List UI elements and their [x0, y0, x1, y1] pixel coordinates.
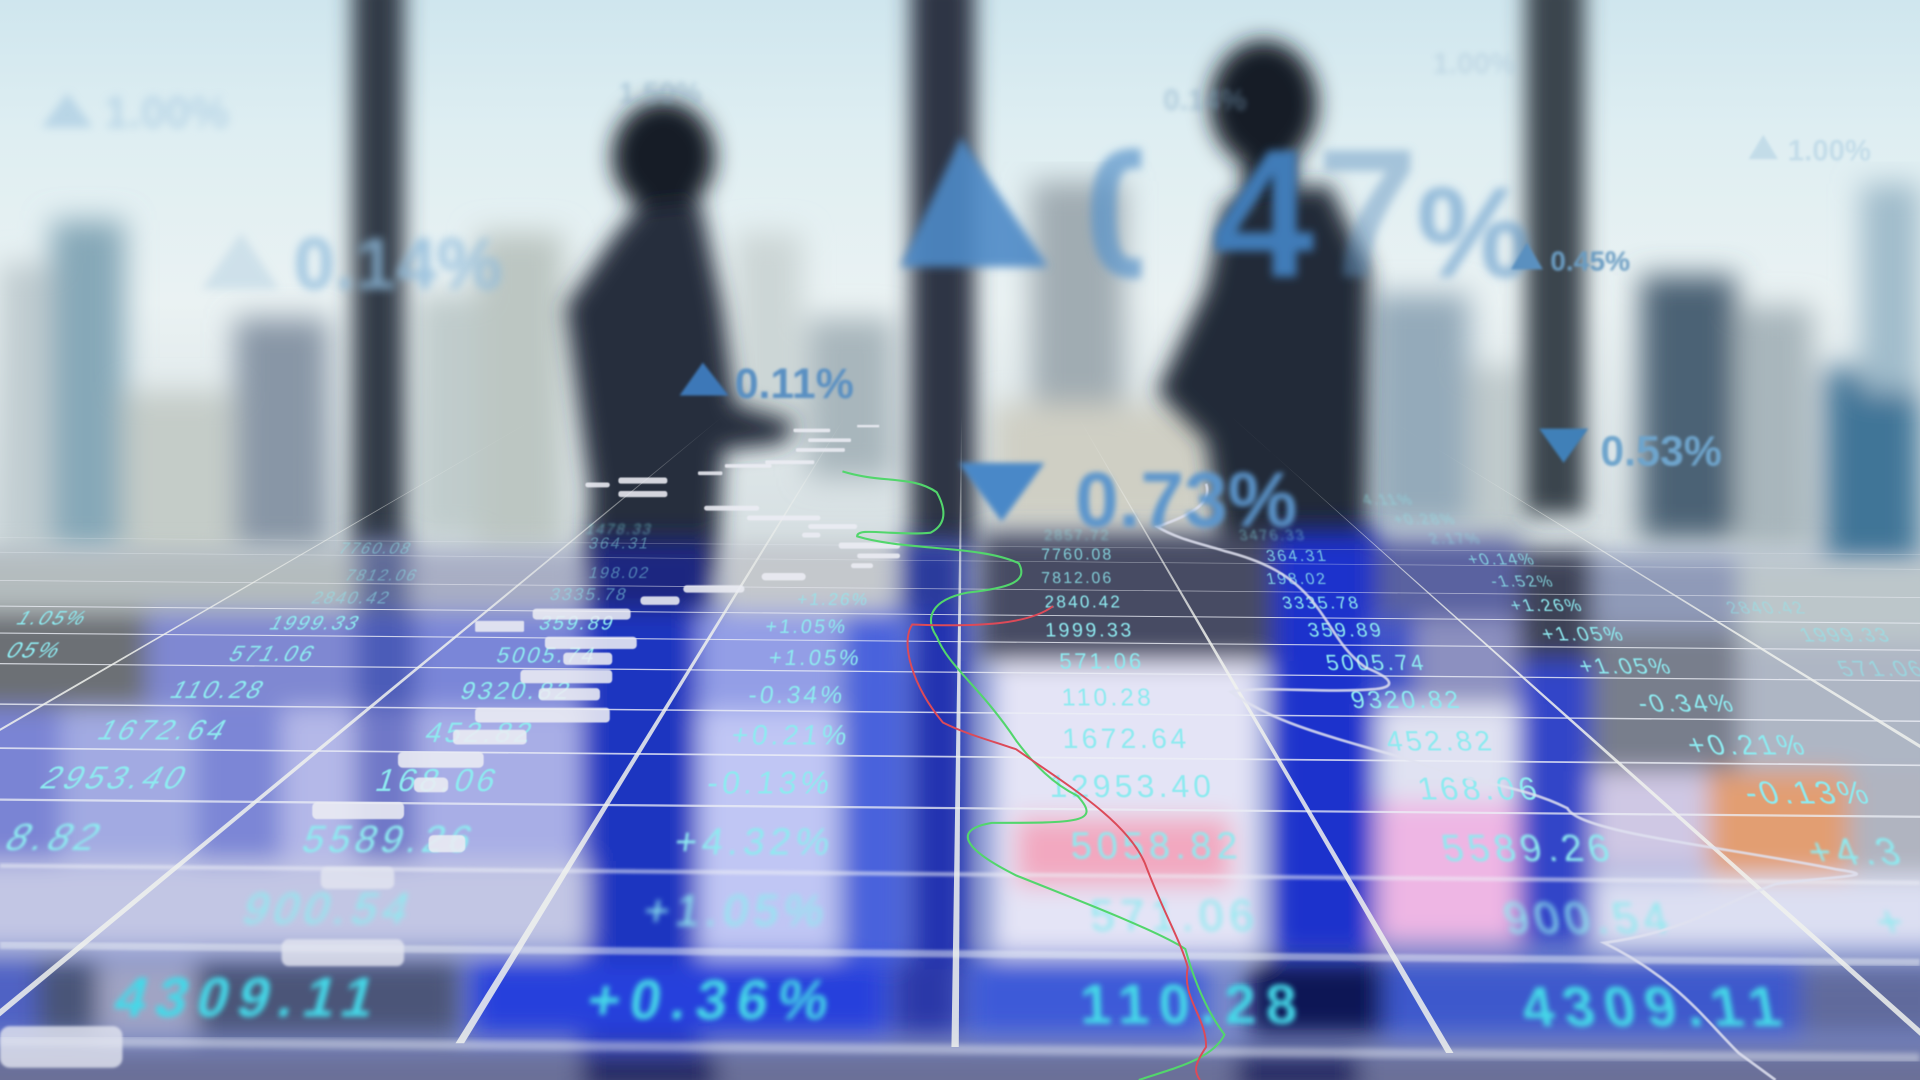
data rows: 571.06	[1059, 649, 1145, 674]
data rows: 110.28	[165, 675, 272, 704]
faint distant rows: 2.17%	[1427, 531, 1484, 548]
floating stat: large 0.47%: 0	[1084, 111, 1186, 316]
floating stat: 0.11%: 0.11%	[735, 360, 854, 408]
near data rows: 5589.26	[297, 819, 482, 861]
data rows: +0.21%	[730, 719, 853, 750]
window columns	[353, 0, 1584, 551]
near data rows: 8.82	[0, 815, 114, 858]
faint distant rows	[584, 492, 1484, 548]
data rows: 110.28	[1061, 684, 1155, 711]
far data rows: 2840.42	[1722, 598, 1810, 617]
row band 5	[0, 961, 37, 1035]
data rows: +1.05%	[1574, 653, 1677, 678]
floating stat: 0.45%: 0.45%	[1550, 246, 1630, 277]
hero scene: blurred office and market data: 900.54	[237, 883, 422, 933]
horizontal rules	[0, 538, 1920, 1058]
hero scene: blurred office and market data: +	[1868, 897, 1917, 946]
line chart: green	[842, 471, 1224, 1080]
near data rows: +4.32%	[672, 821, 837, 864]
hero scene: blurred office and market data: 110.28	[1079, 973, 1308, 1036]
data rows: 168.06	[1414, 771, 1544, 807]
data rows: 359.89	[1306, 620, 1386, 642]
city skyline	[0, 181, 1920, 576]
data rows: 168.06	[371, 762, 505, 798]
floating stat: large 0.47%: %	[1417, 162, 1531, 305]
data rows: 12953.40	[1048, 768, 1216, 804]
hero scene: blurred office and market data: +1.05%	[641, 887, 833, 936]
floating stat: large 0.47%	[896, 135, 1531, 284]
far data rows: 7760.08	[336, 539, 416, 557]
data rows: 1999.33	[1045, 620, 1134, 642]
far data rows: 364.31	[587, 535, 653, 553]
far data rows: 3335.78	[1280, 593, 1362, 613]
data rows: +0.21%	[1682, 729, 1813, 761]
floating stat: faint top labels: 0.14%	[1163, 84, 1247, 117]
data rows: 5005.74	[1324, 650, 1428, 675]
faint distant rows: 1478.33	[584, 521, 655, 538]
data rows: 1999.33	[265, 613, 366, 634]
floating stat: 1.00% upper right	[1749, 134, 1871, 167]
data rows: 1.05%	[12, 607, 94, 629]
near data rows	[0, 815, 1912, 873]
far data rows: 2840.42	[308, 588, 395, 607]
hero scene: blurred office and market data: 900.54	[1499, 894, 1679, 943]
far data rows: 364.31	[1264, 547, 1329, 565]
data rows: +1.05%	[764, 616, 849, 638]
hero scene: blurred office and market data: 4309.11	[108, 966, 392, 1029]
faint distant rows: 3476.33	[1238, 528, 1308, 544]
data rows: -0.13%	[705, 765, 836, 800]
floating stat: 0.11%	[680, 360, 854, 408]
faint distant rows: 2857.72	[1044, 528, 1111, 544]
silhouette: right person	[1157, 40, 1369, 576]
data rows: 452.82	[421, 718, 539, 749]
far data rows: +1.26%	[796, 589, 871, 609]
line chart: red	[908, 606, 1206, 1080]
faint distant rows: 4.11%	[1360, 492, 1416, 508]
far data rows: 198.02	[587, 564, 653, 582]
floating stat: large 0.47%: 7	[1316, 111, 1418, 316]
floating stat: 1.00% upper left	[42, 88, 229, 137]
row band 1	[0, 551, 355, 612]
data rows: 359.89	[536, 613, 618, 634]
lower screen colour wash	[0, 539, 1920, 1080]
far data rows: 7812.06	[342, 566, 422, 584]
hero scene: blurred office and market data: 571.06	[1089, 892, 1261, 941]
row band 2	[0, 612, 147, 708]
data rows	[1, 607, 1920, 811]
data rows: +1.05%	[1538, 624, 1629, 645]
floating stat: 1.00% upper right: 1.00%	[1788, 134, 1871, 167]
floating stat: 0.53%	[1539, 427, 1722, 475]
converging rules	[0, 416, 1920, 1053]
data rows: 9320.82	[1348, 687, 1465, 714]
near data rows: +4.3	[1800, 831, 1912, 873]
candlestick bars	[312, 425, 900, 852]
far data rows: -1.52%	[1487, 572, 1557, 590]
blurred candlestick bars	[0, 867, 404, 1068]
data rows: 1672.64	[92, 715, 236, 746]
far data rows: 7760.08	[1041, 547, 1114, 564]
floating stat: 0.14% left: 0.14%	[294, 222, 502, 305]
line chart: white	[1157, 484, 1857, 1080]
floating stat: 0.73%	[959, 456, 1297, 544]
data rows: 1672.64	[1061, 722, 1191, 754]
floating stat: 0.14% left	[202, 222, 502, 305]
near data rows: 5589.26	[1438, 827, 1618, 870]
faint distant rows: +0.28%	[1391, 512, 1459, 528]
data rows: -0.34%	[747, 682, 847, 709]
row band 4	[0, 861, 588, 949]
bottom strip	[0, 1051, 1920, 1080]
data rows: 05%	[1, 638, 69, 663]
data rows: -0.13%	[1738, 775, 1878, 811]
data rows: +1.05%	[767, 645, 863, 670]
far data rows: 3335.78	[548, 584, 631, 604]
near data rows: 5058.82	[1070, 825, 1243, 867]
row band 3	[0, 708, 61, 861]
data rows: 9320.82	[457, 678, 577, 705]
hero scene: blurred office and market data: 4309.11	[1517, 977, 1795, 1039]
data rows: 1999.33	[1796, 625, 1896, 646]
far data rows	[308, 535, 1810, 617]
floating stat: 0.53%: 0.53%	[1600, 427, 1722, 475]
far data rows: 7812.06	[1041, 570, 1114, 587]
floating stat: 0.73%: 0.73%	[1075, 456, 1297, 544]
floating stat: 0.45%	[1511, 242, 1630, 277]
screen colour blocks	[0, 527, 1920, 1080]
table grid	[0, 538, 1920, 1058]
far data rows: +0.14%	[1464, 550, 1539, 568]
silhouette: left person	[566, 100, 796, 576]
floating stat: faint top labels: 1.50%	[618, 77, 702, 110]
data rows: 2953.40	[34, 760, 197, 796]
far data rows: 198.02	[1264, 570, 1329, 588]
far data rows: 2840.42	[1044, 591, 1123, 611]
data rows: -0.34%	[1633, 690, 1740, 717]
data rows: 571.06	[225, 642, 322, 666]
floating stat: large 0.47%: 4	[1212, 111, 1314, 316]
data rows: 452.82	[1383, 726, 1498, 758]
floating stat: faint top labels: 1.00%	[1433, 47, 1516, 80]
hero scene: blurred office and market data: +0.36%	[584, 968, 842, 1031]
data rows: 5005.74	[493, 643, 601, 667]
floating stat: 1.00% upper left: 1.00%	[104, 88, 229, 137]
far data rows: +1.26%	[1507, 596, 1587, 615]
floating stat: faint top labels	[618, 47, 1516, 117]
